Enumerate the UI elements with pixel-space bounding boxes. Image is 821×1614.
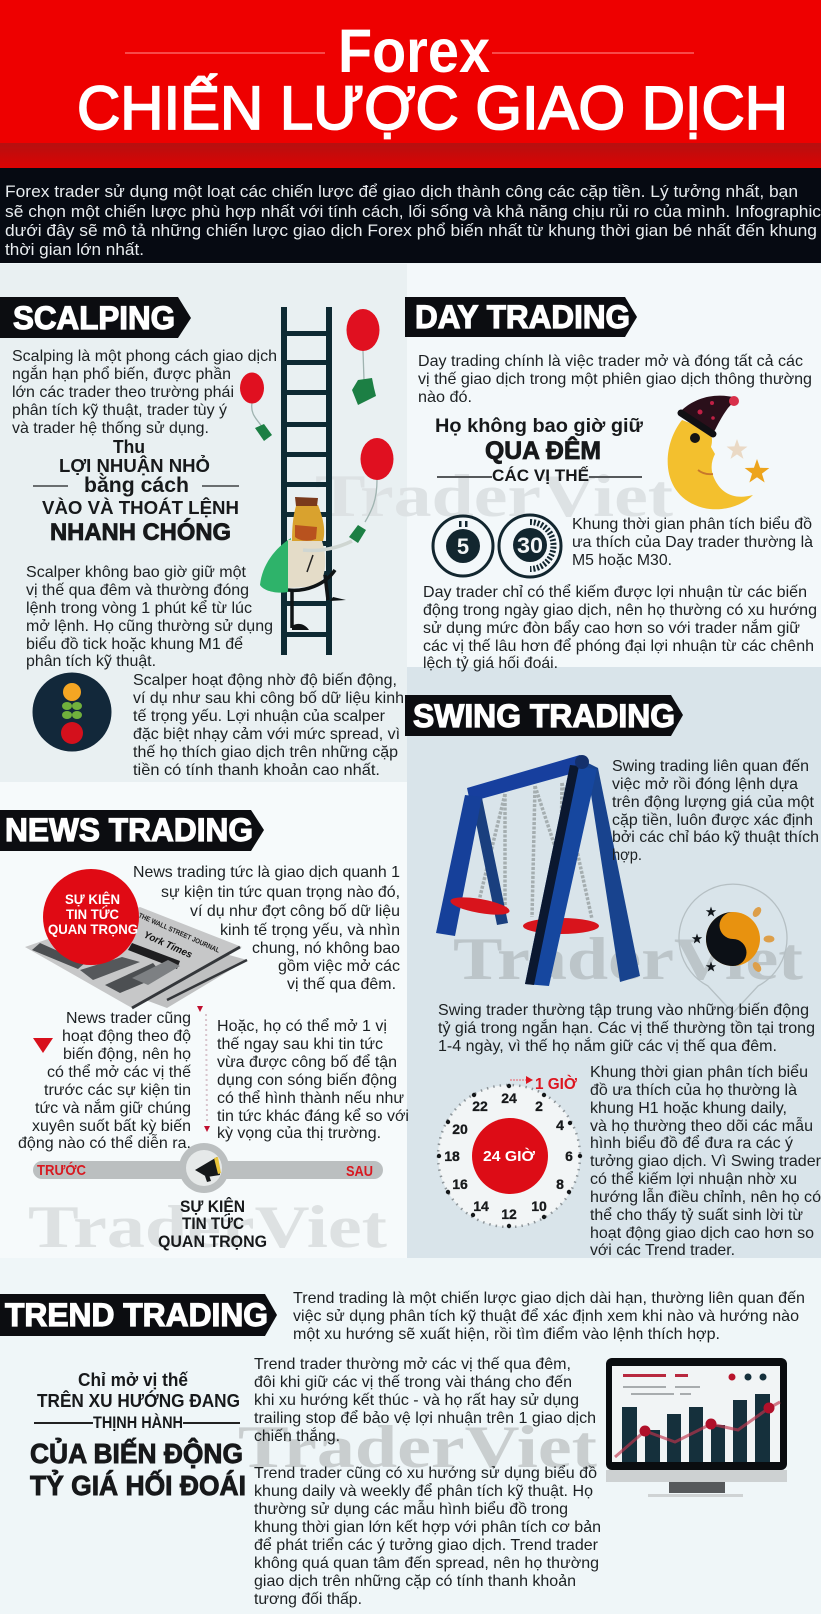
icon: newspaper: [25, 907, 247, 1008]
callout: small profits: LỢI NHUẬN NHỎ: [59, 455, 210, 476]
callout: trend positions: THỊNH HÀNH: [93, 1413, 183, 1432]
panel: day trading: [405, 297, 817, 672]
text: trend intro: một xu hướng sẽ xuất hiện, rồi tìm điểm vào lệnh thích hợp.: [293, 1325, 720, 1343]
text: swing holding period: Swing trader thường tập trung vào những biến động: [438, 1002, 809, 1019]
text: swing timeframes: với các Trend trader.: [590, 1242, 735, 1259]
panel: intro text band: sẽ chọn một chiến lược phù hợp nhất với tính cách, lối sống và khả năng chịu rủi ro của mình. Infographic: [5, 203, 821, 221]
text: scalper volatility: [133, 672, 404, 779]
trend line: [615, 1402, 780, 1457]
callout: trend positions: TRÊN XU HƯỚNG ĐANG: [37, 1390, 240, 1411]
callout: small profits: [33, 437, 239, 546]
text: swing holding period: 1-4 ngày, vì thế họ nắm giữ các vị thế qua đêm.: [438, 1036, 777, 1055]
text: scalper volatility: tiền có tính thanh khoản cao nhất.: [133, 762, 380, 779]
clock numbers: 10: [531, 1198, 547, 1214]
panel: title banner: [0, 0, 821, 168]
callout: small profits: NHANH CHÓNG: [50, 518, 231, 546]
heading: DAY TRADING: DAY TRADING: [415, 299, 630, 335]
text: swing holding period: [438, 1002, 815, 1055]
text: day trading intro: Day trading chính là việc trader mở và đóng tất cả các: [418, 353, 803, 370]
watermark: TraderViet news: TraderViet: [28, 1194, 387, 1260]
heading: TREND TRADING: TREND TRADING: [5, 1297, 268, 1333]
text: day trading intro: vị thế giao dịch trong một phiên giao dịch thông thường: [418, 371, 812, 388]
text: swing holding period: tỷ giá trong ngắn hạn. Các vị thế thường tồn tại trong: [438, 1018, 815, 1037]
text: leverage: [423, 583, 817, 672]
callout: trend positions: [30, 1370, 246, 1501]
text: leverage: các vị thế lâu hơn để phóng đại lợi nhuận từ các chênh: [423, 637, 814, 655]
text: trend intro: Trend trading là một chiến lược giao dịch dài hạn, thường liên quan đến: [293, 1290, 805, 1307]
text: swing timeframes: khung H1 hoặc khung daily,: [590, 1100, 787, 1117]
icon: balloon left: [240, 372, 272, 441]
panel: intro text band: [0, 168, 821, 263]
icon: M5 timer: [433, 516, 493, 576]
text: scalper volatility: đặc biệt nhạy cảm với mức spread, vì: [133, 726, 400, 743]
callout: trend positions: TỶ GIÁ HỐI ĐOÁI: [30, 1469, 246, 1501]
text: swing intro: [612, 758, 819, 864]
text: leverage: Day trader chỉ có thể kiếm được lợi nhuận từ các biến: [423, 583, 807, 601]
icon: monitor chart: [606, 1358, 787, 1497]
text: trend holding: Trend trader thường mở các vị thế qua đêm,: [254, 1356, 571, 1373]
callout: small profits: VÀO VÀ THOÁT LỆNH: [42, 497, 239, 518]
text: masthead two: York Times: [142, 930, 194, 961]
icon: day and night bubble: [679, 884, 787, 1013]
bar chart: [622, 1394, 770, 1462]
text: scalping intro: lớn các trader theo trường phái: [12, 384, 234, 401]
heading: SCALPING: SCALPING: [13, 300, 175, 336]
text: trend holding: đôi khi giữ các vị thế trong vài tháng cho đến: [254, 1374, 572, 1391]
text: swing intro: hợp.: [612, 847, 642, 864]
icon: 24 hour clock: 24 GIỜ: [483, 1147, 535, 1165]
panel: intro text band: thời gian lớn nhất.: [5, 241, 144, 259]
text: scalping intro: [12, 348, 277, 437]
text: news trading intro: ví dụ như đợt công bố dữ liệu: [190, 903, 400, 920]
text: trend charts: thường sử dụng các mẫu hình biểu đồ trong: [254, 1499, 568, 1518]
text: after the news: thế ngay sau khi tin tức: [217, 1036, 383, 1053]
text: after the news: có thể hình thành nếu như: [217, 1089, 404, 1107]
arrow: 1 hour: [510, 1076, 533, 1084]
text: before the news: trước các sự kiện tin: [44, 1082, 191, 1099]
text: trend charts: Trend trader cũng có xu hướng sử dụng biểu đồ: [254, 1464, 597, 1482]
text: swing timeframes: hình biểu đồ để đưa ra các ý: [590, 1134, 793, 1152]
text: trend holding: [254, 1356, 596, 1445]
text: trend charts: khung thời gian lớn kết hợp với phân tích cơ bản: [254, 1519, 601, 1536]
text: scalper volatility: tế trọng yếu. Lợi nhuận của scalper: [133, 708, 386, 725]
clock numbers: 4: [556, 1117, 564, 1133]
panel: trend trading: [0, 1290, 805, 1608]
text: scalper volatility: ví dụ như sau khi công bố dữ liệu kinh: [133, 690, 404, 707]
text: swing timeframes: thể cho thấy tỷ suất sinh lời từ: [590, 1206, 803, 1224]
watermark: TraderViet trend: TraderViet: [238, 1414, 597, 1480]
clock numbers: 2: [535, 1098, 543, 1114]
text: before the news: tức và nắm giữ chúng: [35, 1098, 191, 1117]
text: trend charts: [254, 1464, 601, 1608]
text: before the news: xuyên suốt bất kỳ biến: [32, 1118, 191, 1135]
text: scalper holding: Scalper không bao giờ giữ một: [26, 564, 247, 581]
callout: never overnight: [435, 416, 643, 485]
icon: red down triangle: [33, 1038, 53, 1053]
text: scalping intro: Scalping là một phong cách giao dịch: [12, 348, 277, 365]
clock numbers: 20: [452, 1121, 468, 1137]
text: trend charts: khung daily và weekly để phân tích kỹ thuật. Họ: [254, 1482, 593, 1500]
icon: balloon lower: [360, 438, 394, 522]
heading: NEWS TRADING: NEWS TRADING: [5, 812, 253, 848]
text: trend charts: tương đối thấp.: [254, 1591, 362, 1608]
text: preferred timeframes: [572, 515, 813, 569]
text: after the news: dụng con sóng biến động: [217, 1072, 397, 1089]
callout: trend positions: Chỉ mở vị thế: [78, 1370, 189, 1390]
caption: news event: QUAN TRỌNG: [158, 1232, 267, 1251]
text: after the news: [217, 1017, 409, 1142]
icon: M5 timer: 5: [457, 534, 469, 559]
label: 1 hour: 1 GIỜ: [535, 1074, 577, 1093]
text: scalper holding: mở lệnh. Họ cũng thường sử dụng: [26, 618, 273, 635]
text: leverage: lệch tỷ giá hối đoái.: [423, 655, 558, 672]
timeline: before and after: [33, 1143, 383, 1193]
clock numbers: 22: [472, 1098, 488, 1114]
caption: news event: TIN TỨC: [182, 1214, 244, 1233]
text: swing intro: cặp tiền, luôn được xác định: [612, 812, 813, 829]
text: after the news: vừa được công bố để tận: [217, 1053, 397, 1071]
text: trend charts: không quá quan tâm đến spread, nên họ thường: [254, 1555, 599, 1572]
text: scalping intro: phân tích kỹ thuật, trader tùy ý: [12, 402, 227, 419]
text: before the news: [18, 1010, 191, 1152]
panel: scalping: [0, 297, 404, 779]
text: scalper holding: vị thế qua đêm và thường đóng: [26, 582, 249, 599]
text: trend holding: chiến thắng.: [254, 1426, 340, 1445]
callout: never overnight: QUA ĐÊM: [485, 435, 601, 465]
text: scalper holding: [26, 564, 273, 670]
text: day trading intro: [418, 353, 812, 406]
text: swing timeframes: hướng lẫn điều chỉnh, nên họ có: [590, 1187, 821, 1206]
text: news trading intro: kinh tế trọng yếu, và nhìn: [220, 922, 400, 939]
callout: trend positions: CỦA BIẾN ĐỘNG: [30, 1437, 243, 1469]
text: scalper holding: biểu đồ tick hoặc khung M1 để: [26, 635, 243, 653]
text: leverage: sử dụng mức đòn bẩy cao hơn so với trader nắm giữ: [423, 618, 800, 637]
text: before the news: có thể mở các vị thế: [47, 1063, 191, 1081]
arrow: dotted timing line: [197, 1006, 210, 1132]
icon: 24 hour clock: [437, 1074, 582, 1228]
text: after the news: tin tức khác đáng kể so với: [217, 1107, 409, 1125]
text: before the news: động nào có thể diễn ra.: [18, 1133, 191, 1152]
text: scalper holding: lệnh trong vòng 1 phút kể từ lúc: [26, 599, 252, 617]
watermark: TraderViet swing: TraderViet: [453, 926, 803, 992]
icon: plant and coin: [32, 672, 112, 752]
callout: small profits: bằng cách: [84, 473, 189, 497]
clock numbers: 6: [565, 1148, 573, 1164]
text: news trading intro: chung, nó không bao: [252, 940, 400, 957]
badge: news event: TIN TỨC: [66, 905, 119, 922]
text: trend holding: khi xu hướng kết thúc - và họ rất hay sử dụng: [254, 1392, 579, 1409]
text: swing intro: việc mở rồi đóng lệnh dựa: [612, 776, 798, 793]
text: swing timeframes: đồ ưa thích của họ thường là: [590, 1082, 797, 1099]
timeline: before and after: SAU: [346, 1163, 373, 1180]
text: swing intro: Swing trading liên quan đến: [612, 758, 809, 775]
heading: SWING TRADING: SWING TRADING: [413, 698, 675, 734]
text: news trading intro: vị thế qua đêm.: [287, 976, 396, 993]
clock numbers: 16: [452, 1176, 468, 1192]
clock numbers: 8: [556, 1176, 564, 1192]
text: trend holding: trailing stop để bảo vệ lợi nhuận trên 1 giao dịch: [254, 1409, 596, 1427]
title: Forex: Forex: [338, 17, 490, 85]
text: news trading intro: News trading tức là giao dịch quanh 1: [133, 864, 400, 881]
badge: news event: QUAN TRỌNG: [48, 921, 138, 937]
caption: news event: SỰ KIỆN: [180, 1197, 245, 1216]
text: trend intro: việc sử dụng phân tích kỹ thuật để xác định xem khi nào và hướng nào: [293, 1307, 799, 1325]
icon: balloon top right: [346, 309, 380, 405]
text: before the news: biến động, nên họ: [63, 1046, 191, 1063]
icon: megaphone: [195, 1157, 221, 1182]
text: swing intro: trên động lượng giá của một: [612, 794, 815, 811]
clock numbers: 12: [501, 1206, 517, 1222]
text: news trading intro: [133, 864, 400, 993]
text: before the news: News trader cũng: [66, 1010, 191, 1027]
caption: news event: [158, 1197, 267, 1251]
panel: swing trading: [405, 695, 821, 1259]
badge: news event: [43, 869, 139, 965]
text: preferred timeframes: Khung thời gian phân tích biểu đồ: [572, 515, 812, 533]
panel: news trading: [0, 810, 409, 1251]
callout: small profits: Thu: [113, 437, 145, 457]
text: swing timeframes: Khung thời gian phân tích biểu: [590, 1063, 808, 1081]
panel: intro text band: dưới đây sẽ mô tả những chiến lược giao dịch Forex phổ biến nhất từ khung thời gian bé nhất đến khung: [5, 222, 817, 240]
text: scalper volatility: thế họ thích giao dịch trên những cặp: [133, 744, 398, 761]
clock numbers: 18: [444, 1148, 460, 1164]
panel: intro text band: Forex trader sử dụng một loạt các chiến lược để giao dịch thành công các cặp tiền. Lý tưởng nhất, bạn: [5, 183, 798, 201]
text: preferred timeframes: M5 hoặc M30.: [572, 552, 672, 569]
text: day trading intro: nào đó.: [418, 389, 472, 406]
text: before the news: hoạt động theo độ: [62, 1028, 191, 1045]
callout: never overnight: CÁC VỊ THẾ: [492, 466, 589, 485]
clock numbers: 24: [501, 1090, 517, 1106]
text: trend charts: giao dịch trên những cặp có tính thanh khoản: [254, 1573, 576, 1590]
callout: never overnight: Họ không bao giờ giữ: [435, 416, 643, 437]
clock numbers: 14: [473, 1198, 489, 1214]
text: trend intro: [293, 1290, 805, 1343]
watermark: TraderViet top: TraderViet: [315, 463, 673, 529]
text: after the news: kỳ vọng của thị trường.: [217, 1125, 381, 1142]
timeline: before and after: TRƯỚC: [37, 1161, 86, 1179]
badge: news event: SỰ KIỆN: [65, 890, 120, 907]
text: scalper volatility: Scalper hoạt động nhờ độ biến động,: [133, 672, 397, 689]
text: masthead: THE WALL STREET JOURNAL: [137, 912, 221, 955]
text: swing timeframes: có thể kiếm lợi nhuận nhờ xu: [590, 1170, 797, 1188]
text: trend charts: để phát triển các ý tưởng giao dịch. Trend trader: [254, 1536, 599, 1554]
text: swing timeframes: tưởng giao dịch. Vì Swing trader: [590, 1153, 821, 1170]
text: after the news: Hoặc, họ có thể mở 1 vị: [217, 1017, 387, 1035]
text: scalping intro: ngắn hạn phổ biến, được phần: [12, 364, 231, 383]
clock numbers: [444, 1090, 573, 1222]
text: news trading intro: gồm việc mở các: [278, 958, 400, 975]
icon: trader climbing: [260, 497, 366, 630]
text: scalper holding: phân tích kỹ thuật.: [26, 653, 156, 670]
icon: moon with hat: [668, 396, 769, 509]
monitor labels: [623, 1374, 766, 1395]
icon: ladder: [281, 307, 332, 655]
title: strategy: CHIẾN LƯỢC GIAO DỊCH: [77, 74, 788, 142]
icon: M30 timer: 30: [517, 533, 543, 558]
text: scalping intro: và trader hệ thống sử dụng.: [12, 420, 209, 437]
text: swing intro: bởi các chỉ báo kỹ thuật thích: [612, 829, 819, 846]
clock rim dots: [437, 1084, 582, 1228]
text: news trading intro: sự kiện tin tức quan trọng nào đó,: [161, 884, 400, 901]
text: swing timeframes: và họ thường theo dõi các mẫu: [590, 1116, 813, 1135]
icon: swing set: [436, 755, 640, 986]
text: preferred timeframes: ưa thích của Day trader thường là: [572, 534, 813, 551]
text: leverage: động trong ngày giao dịch, nên họ thường có xu hướng: [423, 602, 817, 619]
icon: M30 timer: [499, 515, 561, 577]
text: swing timeframes: hoạt động giao dịch cao hơn so: [590, 1225, 814, 1242]
text: swing timeframes: [590, 1063, 821, 1259]
